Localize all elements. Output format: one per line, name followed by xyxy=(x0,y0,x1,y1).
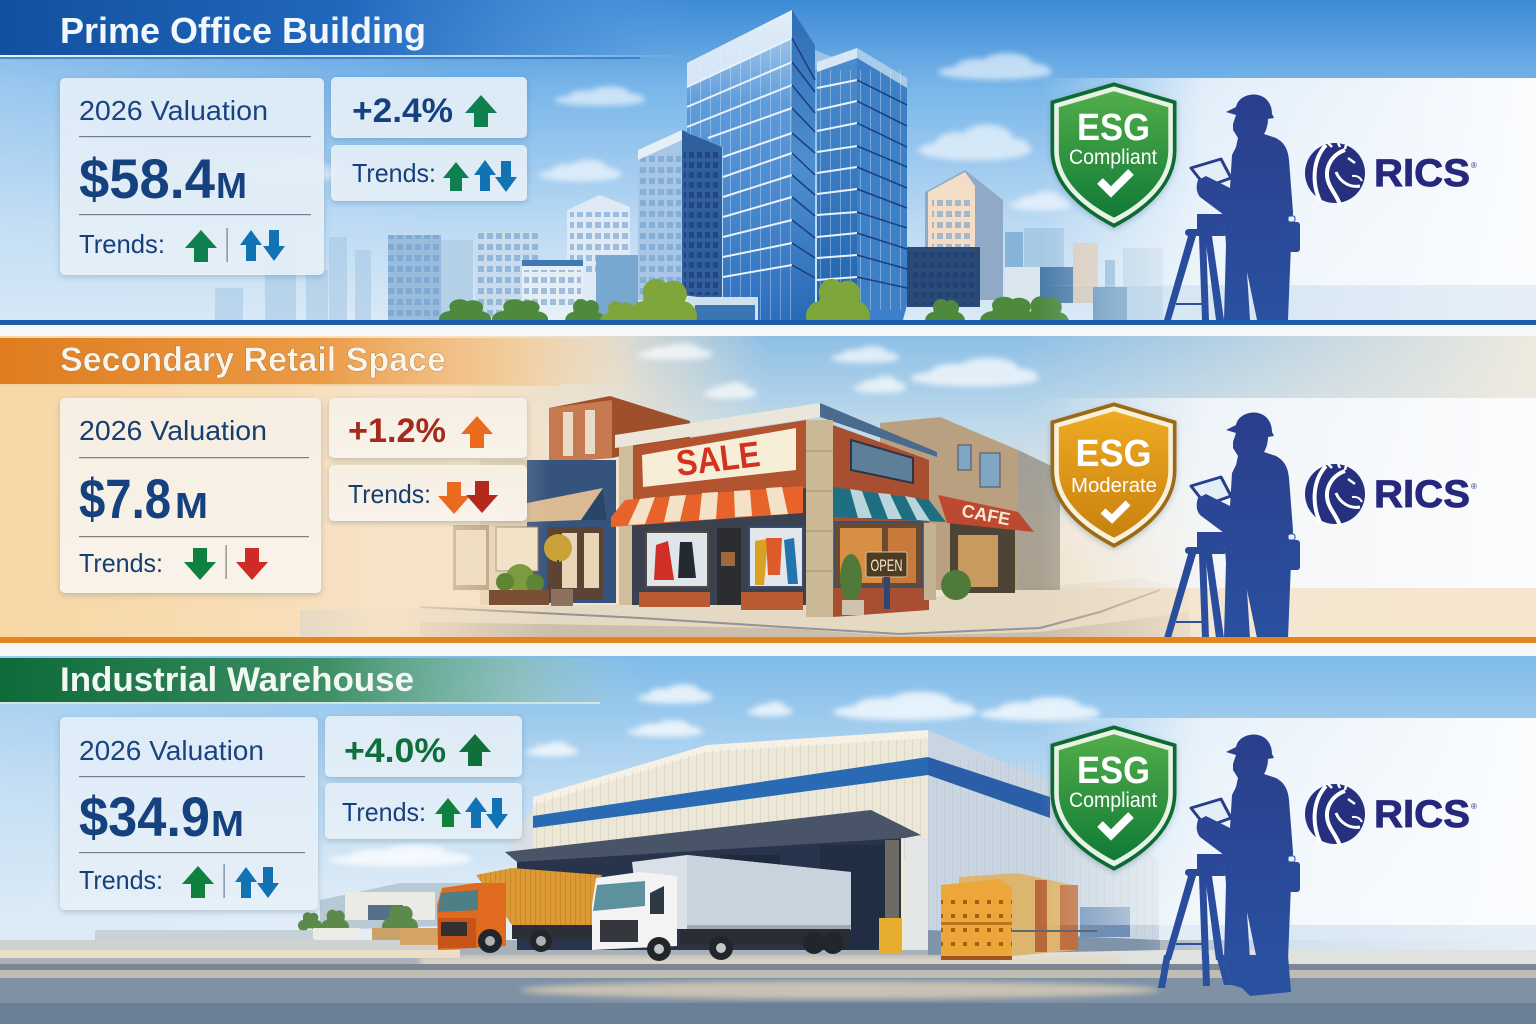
heading: Industrial Warehouse xyxy=(60,661,414,699)
growth card xyxy=(325,716,522,777)
sky background xyxy=(0,336,1536,640)
cafe building xyxy=(880,417,1060,600)
RICS logo xyxy=(1305,784,1477,846)
growth card: +2.4% xyxy=(352,92,453,130)
trees xyxy=(438,278,1069,320)
bottom rule xyxy=(0,637,1536,643)
trends card: Trends: xyxy=(352,158,436,188)
valuation card: M xyxy=(211,803,244,844)
valuation card: Trends: xyxy=(79,548,163,578)
panel: Industrial Warehouse xyxy=(0,656,1536,1024)
ESG badge: compliant: ESG xyxy=(1077,750,1150,792)
ESG badge: compliant: Compliant xyxy=(1069,789,1157,812)
cafe sign: CAFE xyxy=(960,501,1012,529)
growth card xyxy=(329,398,527,458)
valuation card xyxy=(60,78,324,275)
street ground xyxy=(300,578,1190,638)
awning xyxy=(611,486,803,527)
windows xyxy=(646,532,708,587)
heading: Prime Office Building xyxy=(60,10,426,51)
valuation card: Trends: xyxy=(79,229,165,259)
valuation card: 2026 Valuation xyxy=(79,95,268,126)
distant skyline xyxy=(215,170,1163,320)
main shop xyxy=(611,403,946,617)
trends card xyxy=(325,783,522,839)
RICS logo: ® xyxy=(1471,482,1477,491)
sign xyxy=(642,428,796,487)
trends card: Trends: xyxy=(348,479,431,509)
valuation card: $34.9 xyxy=(79,785,210,848)
valuation card: 2026 Valuation xyxy=(79,735,264,766)
right white panel xyxy=(1040,718,1536,950)
orange truck xyxy=(437,868,602,953)
trends card xyxy=(329,465,527,521)
warehouse xyxy=(505,730,1160,955)
valuation card: 2026 Valuation xyxy=(79,415,267,446)
storefront left xyxy=(453,396,690,605)
right white panel xyxy=(1040,398,1536,638)
valuation card: Trends: xyxy=(79,865,163,895)
office towers xyxy=(638,10,907,320)
panel: Prime Office Building xyxy=(0,0,1536,334)
RICS logo: RICS xyxy=(1374,152,1470,195)
valuation card: M xyxy=(175,485,208,526)
growth card: +4.0% xyxy=(344,732,446,770)
sky background xyxy=(0,656,1536,1024)
valuation card: $7.8 xyxy=(79,467,171,530)
ESG badge: compliant xyxy=(1052,84,1175,226)
sky background xyxy=(0,0,1536,322)
valuation card xyxy=(60,717,318,910)
clouds xyxy=(637,343,1040,399)
RICS logo: RICS xyxy=(1374,793,1470,836)
right awning xyxy=(833,487,946,522)
RICS logo: ® xyxy=(1471,802,1477,811)
header band xyxy=(0,338,640,386)
header band xyxy=(0,0,700,59)
heading: Secondary Retail Space xyxy=(60,341,446,379)
clouds xyxy=(328,684,1101,866)
side windows xyxy=(851,440,913,483)
background buildings xyxy=(298,883,473,936)
valuation card: M xyxy=(216,165,247,206)
header band xyxy=(0,658,650,704)
ground xyxy=(0,928,1536,1024)
ESG badge: compliant xyxy=(1052,727,1175,869)
bottom rule xyxy=(0,320,1536,325)
valuation card: $58.4 xyxy=(79,147,215,210)
surveyor silhouette xyxy=(1164,412,1300,638)
RICS logo xyxy=(1305,464,1477,526)
RICS logo: RICS xyxy=(1374,473,1470,516)
trends card xyxy=(331,145,527,201)
panel: Secondary Retail Space xyxy=(0,336,1536,643)
surveyor silhouette xyxy=(1164,94,1300,320)
valuation card xyxy=(60,398,321,593)
right white panel xyxy=(1040,78,1536,321)
white truck xyxy=(592,855,851,961)
growth card xyxy=(331,77,527,138)
clouds xyxy=(237,53,1070,211)
growth card: +1.2% xyxy=(348,412,446,450)
open sign: OPEN xyxy=(870,556,902,575)
ESG badge: moderate: ESG xyxy=(1076,433,1152,475)
open sign xyxy=(866,552,907,577)
main shop: SALE xyxy=(674,433,762,484)
ESG badge: compliant: ESG xyxy=(1077,107,1150,149)
ESG badge: moderate: Moderate xyxy=(1071,475,1157,497)
ESG badge: compliant: Compliant xyxy=(1069,146,1157,169)
surveyor silhouette xyxy=(1158,734,1300,996)
ESG badge: moderate xyxy=(1052,404,1175,546)
RICS logo: ® xyxy=(1471,161,1477,170)
plants xyxy=(489,534,864,615)
pallets xyxy=(941,873,1097,960)
RICS logo xyxy=(1305,143,1477,205)
trends card: Trends: xyxy=(342,797,426,827)
left fade xyxy=(300,385,550,638)
